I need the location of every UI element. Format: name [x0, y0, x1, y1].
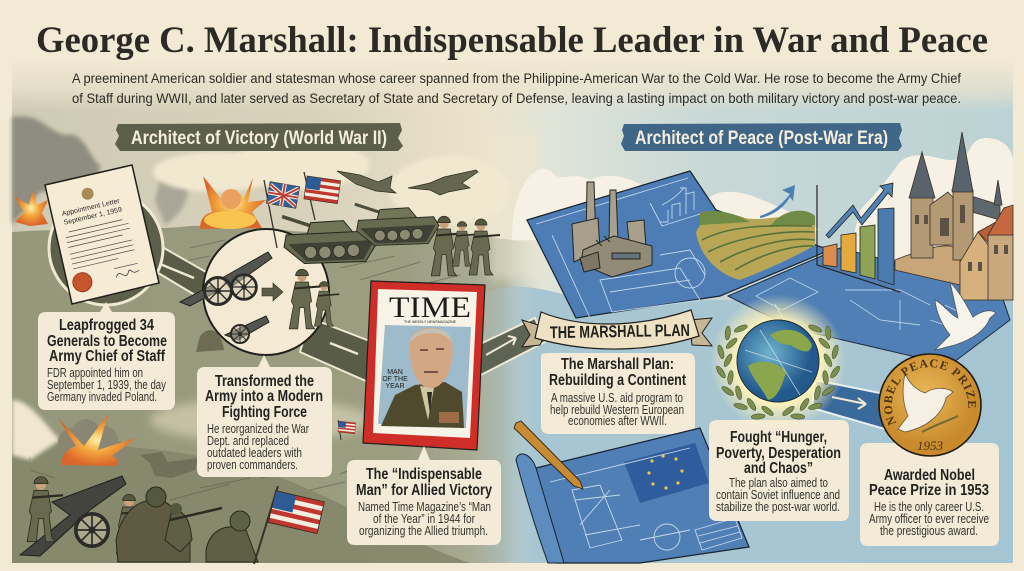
- letter document: September 1, 1959: [63, 207, 123, 227]
- letter document: Appointment Letter: [61, 198, 121, 218]
- bottom clouds: [12, 400, 60, 460]
- Marshall Plan banner: [522, 310, 712, 349]
- callout: Leapfrogged: Leapfrogged 34: [59, 317, 154, 334]
- callout: Fought Hunger: Poverty, Desperation: [716, 445, 841, 462]
- callout: Leapfrogged: [38, 302, 175, 410]
- large US flag: [254, 486, 324, 564]
- farm field: [696, 211, 815, 280]
- callout: Transformed: He reorganized the War: [207, 422, 309, 436]
- large explosion: [200, 176, 266, 229]
- callout: Nobel: Army officer to ever receive: [869, 512, 989, 526]
- TIME cover: TIME: [389, 291, 471, 324]
- callout: Fought Hunger: stabilize the post-war world.: [716, 500, 840, 514]
- callout: Indispensable Man: Named Time Magazine’s “Man: [358, 500, 491, 514]
- heading: Architect of Victory: Architect of Victory (World War II): [131, 128, 387, 149]
- distant figures: [140, 452, 198, 478]
- blueprint sheet: lower right: [728, 248, 1010, 365]
- callout: Nobel: the prestigious award.: [880, 524, 978, 538]
- callout: Fought Hunger: The plan also aimed to: [729, 476, 828, 490]
- blueprint sheet: upper left: [527, 171, 830, 318]
- TIME cover: MAN: [387, 369, 403, 376]
- Nobel medal: NOBEL PEACE PRIZE: [884, 359, 976, 426]
- Marshall Plan banner: THE MARSHALL PLAN: [550, 321, 690, 342]
- callout: Transformed: outdated leaders with: [207, 446, 302, 460]
- callout: Indispensable Man: [347, 446, 501, 545]
- Nobel medal: [878, 353, 982, 457]
- letter document: [45, 165, 159, 304]
- heading: Architect of Victory: [115, 123, 403, 151]
- intro text: [72, 70, 961, 106]
- flags: UK and USA: [264, 172, 341, 248]
- intro text: of Staff during WWII, and later served as Secretary of State and Secretary of Defense, leaving a lasting impact on both military victory and post-war peace.: [72, 90, 961, 106]
- callout: Transformed: Dept. and replaced: [207, 434, 289, 448]
- small explosion left: [14, 190, 48, 226]
- callout: Indispensable Man: organizing the Allied triumph.: [359, 524, 488, 538]
- callout: Indispensable Man: Man” for Allied Victory: [356, 482, 492, 499]
- foreground cannon and soldiers: [20, 476, 258, 562]
- church and town: [895, 132, 1013, 300]
- callout: Transformed: Transformed the: [215, 373, 314, 390]
- clouds: war side: [153, 141, 510, 224]
- bottom blueprint roll: [516, 428, 749, 563]
- callout: Fought Hunger: [709, 420, 849, 521]
- callout: Marshall Plan: A massive U.S. aid program to: [551, 391, 683, 405]
- callout: Nobel: [860, 443, 999, 546]
- TIME cover: [363, 281, 485, 450]
- callout: Leapfrogged: Army Chief of Staff: [49, 348, 166, 365]
- flow arrow: globe to Nobel: [812, 380, 890, 430]
- planes: [337, 170, 478, 195]
- explosion bottom-left: [58, 414, 136, 466]
- callout: Fought Hunger: Fought “Hunger,: [730, 429, 827, 446]
- callout: Marshall Plan: Rebuilding a Continent: [549, 372, 686, 389]
- callout: Marshall Plan: help rebuild Western European: [550, 403, 684, 417]
- pen: [514, 421, 583, 489]
- callout: Marshall Plan: [541, 353, 695, 434]
- blue growth arrow: [760, 185, 795, 218]
- callout: Marshall Plan: economies after WWII.: [568, 414, 667, 428]
- callout: Transformed: Fighting Force: [222, 404, 307, 421]
- TIME cover: YEAR: [385, 383, 405, 390]
- clouds: peace side: [512, 138, 1013, 290]
- factory: [572, 182, 652, 277]
- dark circle behind letter: [49, 191, 163, 305]
- heading: Architect of Peace: Architect of Peace (Post-War Era): [635, 128, 888, 149]
- soldiers top right: [431, 216, 500, 276]
- tanks: [282, 204, 439, 264]
- title: George C. Marshall: Indispensable Leader in War and Peace: [36, 20, 988, 61]
- callout: Leapfrogged: Germany invaded Poland.: [47, 390, 157, 404]
- callout: Leapfrogged: FDR appointed him on: [47, 366, 143, 380]
- road arrow: army to TIME: [300, 318, 380, 385]
- callout: Indispensable Man: The “Indispensable: [366, 466, 482, 483]
- smoke top-left: [12, 116, 188, 225]
- callout: Nobel: Awarded Nobel: [884, 467, 975, 484]
- callout: Marshall Plan: The Marshall Plan:: [561, 356, 674, 373]
- road arrow: letter to army: [150, 240, 220, 304]
- TIME cover: OF THE: [382, 376, 408, 383]
- bar chart: [817, 183, 900, 292]
- callout: Transformed: proven commanders.: [207, 458, 298, 472]
- callout: Transformed: [197, 355, 332, 477]
- road arrow: TIME to Marshall Plan: [475, 318, 545, 378]
- TIME cover: THE WEEKLY NEWSMAGAZINE: [404, 320, 457, 324]
- army circle: [180, 229, 339, 355]
- heading: Architect of Peace: [621, 123, 902, 151]
- Nobel medal: 1953: [917, 438, 944, 453]
- globe with laurel: [710, 294, 846, 430]
- intro text: A preeminent American soldier and statesman whose career spanned from the Philippine-American War to the Cold War. He rose to become the Army Chief: [72, 70, 961, 86]
- callout: Nobel: Peace Prize in 1953: [869, 482, 989, 499]
- bottom-left flags: [23, 420, 356, 460]
- callout: Leapfrogged: Generals to Become: [47, 333, 167, 350]
- callout: Fought Hunger: and Chaos”: [744, 460, 813, 477]
- callout: Transformed: Army into a Modern: [205, 388, 323, 405]
- callout: Fought Hunger: contain Soviet influence and: [716, 488, 840, 502]
- callout: Leapfrogged: September 1, 1939, the day: [47, 378, 167, 392]
- dove: [935, 282, 996, 350]
- callout: Nobel: He is the only career U.S.: [874, 500, 984, 514]
- callout: Indispensable Man: of the Year” in 1944 for: [373, 512, 475, 526]
